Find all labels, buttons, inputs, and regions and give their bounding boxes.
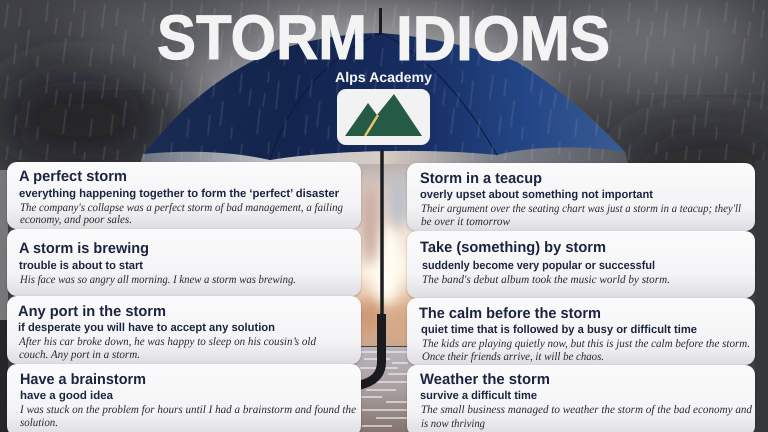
example: couch. Any port in a storm.	[19, 349, 140, 361]
example	[422, 338, 750, 363]
idiom heading: A storm is brewing	[19, 240, 149, 257]
example: His face was so angry all morning. I knew a storm was brewing.	[19, 274, 296, 286]
meaning: suddenly become very popular or successful	[422, 260, 655, 272]
panel: the calm before the storm	[407, 298, 755, 365]
background: sea	[150, 347, 620, 432]
meaning: quiet time that is followed by a busy or difficult time	[421, 324, 697, 336]
meaning: everything happening together to form the ‘perfect’ disaster	[19, 188, 340, 200]
example: economy, and poor sales.	[20, 214, 132, 226]
umbrella canopy	[140, 33, 628, 164]
idiom heading: Storm in a teacup	[420, 170, 542, 187]
example: is now thriving	[421, 418, 485, 430]
panel: storm in a teacup	[407, 163, 755, 231]
meaning: survive a difficult time	[420, 390, 537, 402]
example	[421, 404, 752, 430]
rain overlay	[0, 0, 768, 160]
example	[18, 336, 316, 361]
umbrella tip	[379, 8, 382, 35]
example: The kids are playing quietly now, but this is just the calm before the storm.	[422, 338, 750, 350]
background: sunset sky	[150, 150, 620, 346]
meaning: overly upset about something not important	[420, 189, 653, 201]
academy name: Alps Academy	[335, 69, 432, 85]
panel: take (something) by storm	[407, 231, 755, 298]
idiom heading: A perfect storm	[19, 168, 127, 185]
example: The small business managed to weather the storm of the bad economy and	[421, 404, 752, 416]
meaning: if desperate you will have to accept any solution	[18, 322, 275, 334]
example	[19, 404, 356, 429]
logo: mountains	[337, 89, 430, 145]
idiom heading: Take (something) by storm	[420, 239, 606, 256]
example: Once their friends arrive, it will be chaos.	[422, 351, 604, 363]
idiom heading: Have a brainstorm	[20, 371, 146, 388]
example: solution.	[20, 417, 58, 429]
panel: weather the storm	[407, 365, 755, 432]
example: be over it tomorrow	[421, 216, 510, 228]
example: Their argument over the seating chart was just a storm in a teacup; they'll	[421, 203, 741, 215]
idiom heading: Weather the storm	[420, 371, 550, 388]
panel: any port in the storm	[7, 296, 361, 364]
background: sea highlights	[360, 352, 408, 426]
example: The band's debut album took the music world by storm.	[422, 274, 670, 286]
example: The company's collapse was a perfect storm of bad management, a failing	[20, 202, 343, 214]
example	[20, 202, 343, 226]
umbrella shaft and handle	[360, 150, 382, 385]
title: STORM	[157, 3, 367, 73]
idiom heading: Any port in the storm	[18, 303, 166, 320]
panel: a perfect storm	[7, 162, 361, 229]
example: I was stuck on the problem for hours until I had a brainstorm and found the	[19, 404, 356, 416]
meaning: trouble is about to start	[19, 260, 143, 272]
example	[421, 203, 741, 228]
background: sunset clouds	[356, 172, 410, 339]
panel: have a brainstorm	[7, 364, 361, 432]
example: After his car broke down, he was happy to sleep on his cousin’s old	[18, 336, 316, 348]
title: IDIOMS	[396, 4, 610, 74]
title	[157, 3, 610, 74]
meaning: have a good idea	[20, 390, 114, 402]
idiom heading: The calm before the storm	[419, 305, 601, 322]
panel: a storm is brewing	[7, 229, 361, 296]
